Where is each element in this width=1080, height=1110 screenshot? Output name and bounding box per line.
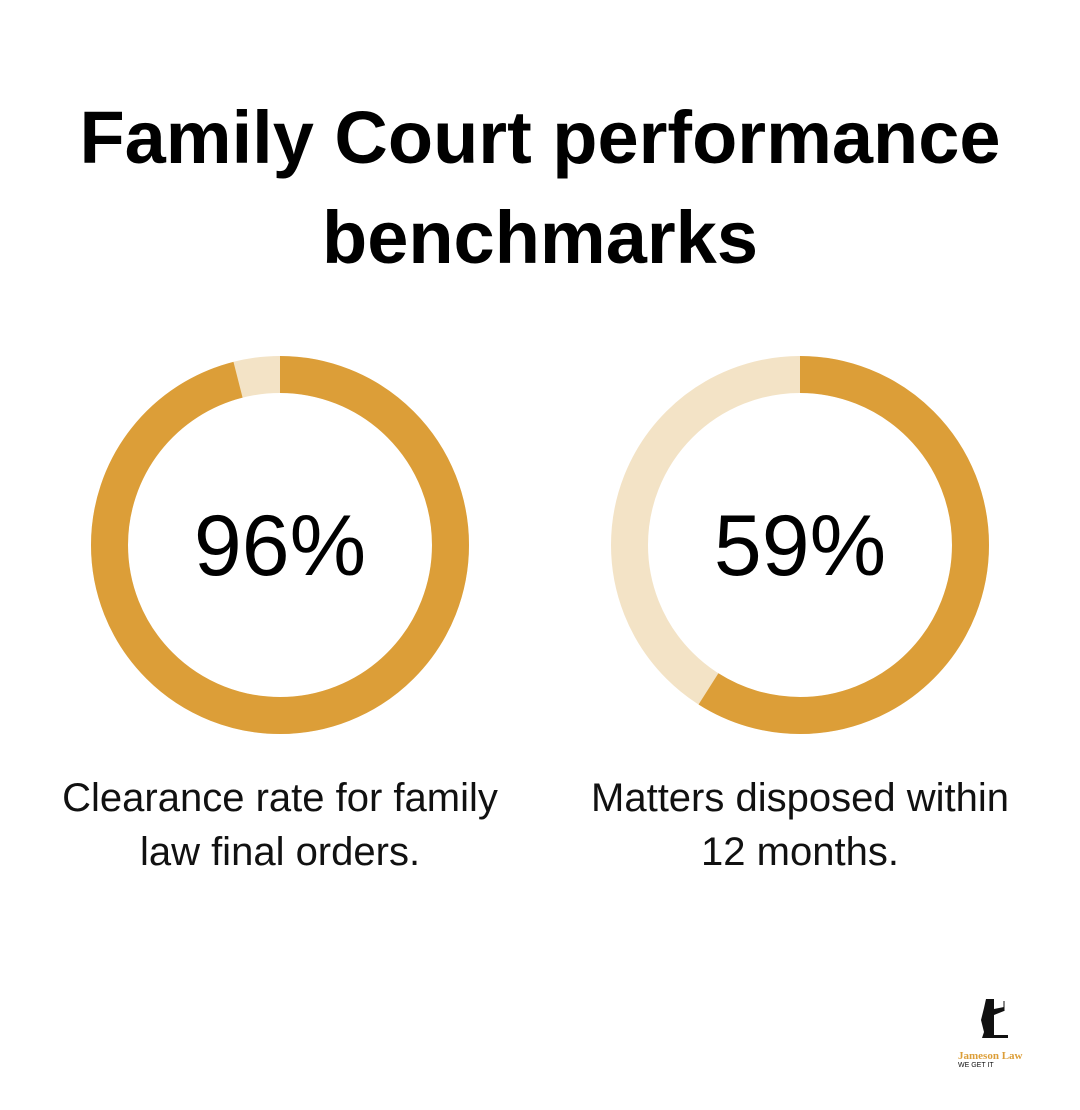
caption: matters disposed: Matters disposed within [591,776,1009,820]
logo: Jameson Law [958,999,1022,1069]
donut chart: 59%: 59% [714,498,886,594]
caption: clearance rate: law final orders. [140,830,420,874]
caption: clearance rate: Clearance rate for family [62,776,498,820]
caption: matters disposed [591,776,1009,874]
donut chart: 59% [611,356,989,734]
title: Family Court performance [79,96,1001,179]
donut chart: 96% [91,356,469,734]
donut chart: 96%: 96% [194,498,366,594]
title: benchmarks [322,196,758,279]
title [79,96,1001,279]
caption: clearance rate [62,776,498,874]
caption: matters disposed: 12 months. [701,830,899,874]
logo: Jameson Law: Jameson Law [958,1050,1022,1062]
text: WE GET IT [958,1062,994,1069]
